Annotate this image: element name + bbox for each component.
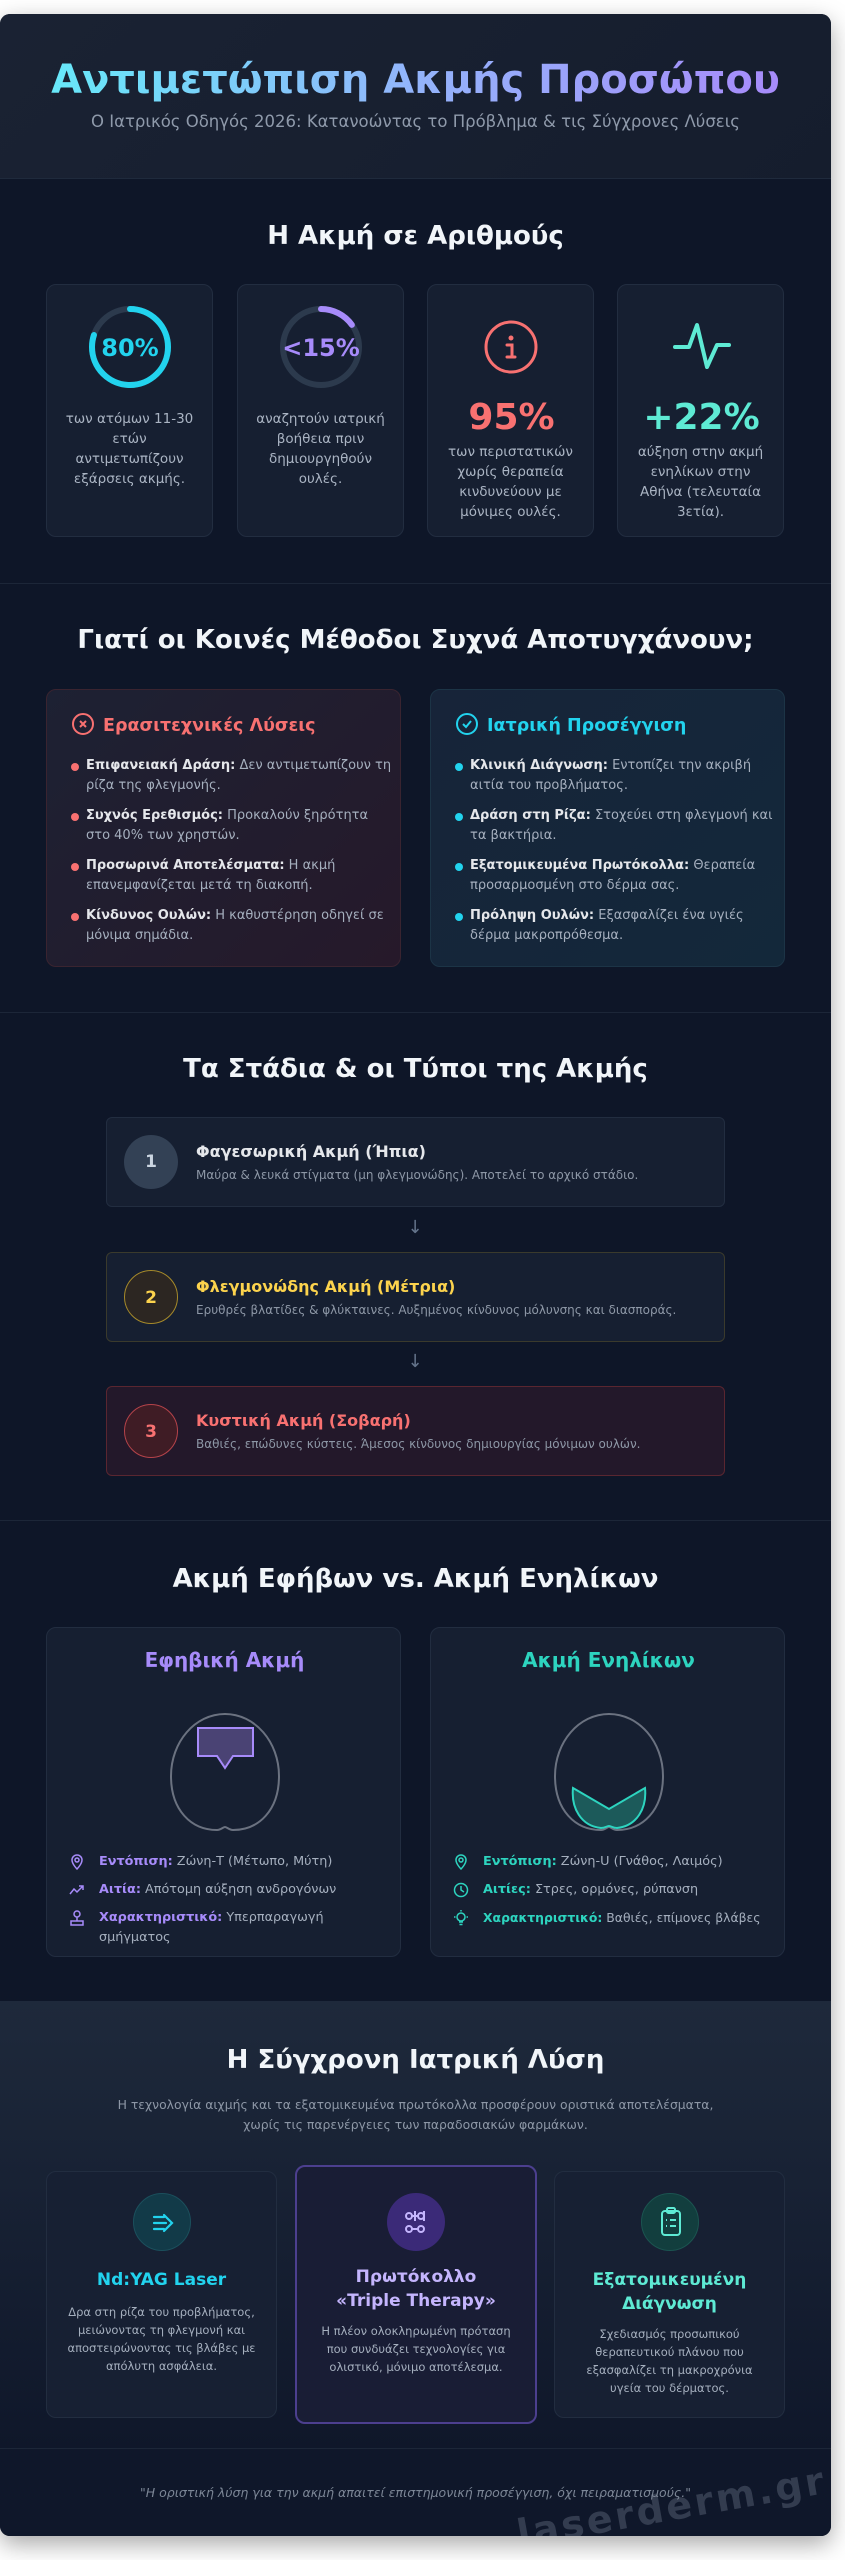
card: triple therapy xyxy=(295,2165,537,2424)
stage 1: Φαγεσωρική Ακμή (Ήπια) xyxy=(196,1142,426,1161)
panel: teen acne xyxy=(46,1627,401,1957)
ring 80% xyxy=(89,306,171,388)
icon: clipboard xyxy=(640,2193,698,2251)
card: triple therapy: «Triple Therapy» xyxy=(336,2291,496,2311)
details list: Χαρακτηριστικό: Βαθιές, επίμονες βλάβες xyxy=(483,1910,760,1925)
panel heading: Ερασιτεχνικές Λύσεις xyxy=(103,716,315,736)
heading: why methods fail: Γιατί οι Κοινές Μέθοδοι Συχνά Αποτυγχάνουν; xyxy=(77,625,754,655)
card: Nd:YAG xyxy=(46,2171,277,2418)
stat text: αναζητούν ιατρική βοήθεια πριν δημιουργηθούν ουλές. xyxy=(256,411,385,487)
details list: Εντόπιση: Ζώνη-Τ (Μέτωπο, Μύτη) xyxy=(99,1854,332,1869)
panel: amateur solutions xyxy=(46,689,401,967)
heading: stages: Τα Στάδια & οι Τύποι της Ακμής xyxy=(183,1054,648,1084)
heading: Η Σύγχρονη Ιατρική Λύση xyxy=(227,2045,604,2075)
heading: stats: Η Ακμή σε Αριθμούς xyxy=(267,221,564,251)
details list: Αιτία: Απότομη αύξηση ανδρογόνων xyxy=(99,1882,336,1897)
stage 2 xyxy=(106,1252,725,1342)
quote: "Η οριστική λύση για την ακμή απαιτεί επιστημονική προσέγγιση, όχι πειραματισμούς." xyxy=(140,2485,691,2500)
section: modern medical solution xyxy=(0,2001,831,2450)
face diagram T-zone xyxy=(170,1713,280,1831)
card: Nd:YAG: Nd:YAG Laser xyxy=(97,2270,226,2290)
ring 15% xyxy=(280,306,362,388)
list: Προσωρινά Αποτελέσματα: Η ακμή επανεμφανίζεται μετά τη διακοπή. xyxy=(86,858,335,893)
list: Εξατομικευμένα Πρωτόκολλα: Θεραπεία προσαρμοσμένη στο δέρμα σας. xyxy=(470,858,755,893)
heading: teen vs adult: Ακμή Εφήβων vs. Ακμή Ενηλίκων xyxy=(173,1564,658,1594)
stage 2: Φλεγμονώδης Ακμή (Μέτρια) xyxy=(196,1277,455,1296)
stage 1: 1 xyxy=(145,1152,157,1172)
stage 3: 3 xyxy=(145,1422,157,1442)
icon: protocol xyxy=(387,2193,445,2251)
details list: Αιτίες: Στρες, ορμόνες, ρύπανση xyxy=(483,1882,698,1897)
stage 2: Ερυθρές βλατίδες & φλύκταινες. Αυξημένος κίνδυνος μόλυνσης και διασποράς. xyxy=(196,1303,676,1317)
number: +22% xyxy=(643,397,760,438)
stat card 1 xyxy=(46,284,213,537)
list: Κίνδυνος Ουλών: Η καθυστέρηση οδηγεί σε μόνιμα σημάδια. xyxy=(86,908,384,943)
subtitle: Ο Ιατρικός Οδηγός 2026: Κατανοώντας το Πρόβλημα & τις Σύγχρονες Λύσεις xyxy=(91,112,740,131)
details list xyxy=(70,1854,336,1945)
stat text: αύξηση στην ακμή ενηλίκων στην Αθήνα (τελευταία 3ετία). xyxy=(638,444,763,520)
card: triple therapy: Η πλέον ολοκληρωμένη πρόταση που συνδυάζει τεχνολογίες για ολιστικό, μόνιμο αποτέλεσμα. xyxy=(321,2324,511,2374)
ring 15%: <15% xyxy=(282,334,360,362)
number: 95% xyxy=(468,397,555,438)
arrow: ↓ xyxy=(407,1217,423,1238)
list: Κλινική Διάγνωση: Εντοπίζει την ακριβή αιτία του προβλήματος. xyxy=(470,758,751,793)
card: personalized diagnosis xyxy=(554,2171,785,2418)
stage 3 xyxy=(106,1386,725,1476)
stat card 2 xyxy=(237,284,404,537)
card: personalized diagnosis: Διάγνωση xyxy=(622,2294,717,2314)
panel title: Ακμή Ενηλίκων xyxy=(522,1648,695,1672)
header xyxy=(0,14,831,179)
intro text: Η τεχνολογία αιχμής και τα εξατομικευμένα πρωτόκολλα προσφέρουν οριστικά αποτελέσματα, xyxy=(118,2097,713,2112)
icon: info xyxy=(484,320,538,374)
list: Δράση στη Ρίζα: Στοχεύει στη φλεγμονή και τα βακτήρια. xyxy=(470,808,772,843)
card: Nd:YAG: Δρα στη ρίζα του προβλήματος, μειώνοντας τη φλεγμονή και αποστειρώνοντας τις βλάβες με απόλυτη ασφάλεια. xyxy=(67,2305,256,2373)
face diagram U-zone xyxy=(554,1713,664,1831)
list xyxy=(71,758,391,943)
stat text: των περιστατικών χωρίς θεραπεία κινδυνεύουν με μόνιμες ουλές. xyxy=(448,444,573,520)
stat card 4 xyxy=(617,284,784,537)
card: personalized diagnosis: Εξατομικευμένη xyxy=(593,2270,746,2290)
stage 1 xyxy=(106,1117,725,1207)
list: Πρόληψη Ουλών: Εξασφαλίζει ένα υγιές δέρμα μακροπρόθεσμα. xyxy=(470,908,744,943)
details list: Εντόπιση: Ζώνη-U (Γνάθος, Λαιμός) xyxy=(483,1854,723,1869)
stage 1: Μαύρα & λευκά στίγματα (μη φλεγμονώδης). Αποτελεί το αρχικό στάδιο. xyxy=(196,1168,638,1182)
arrow: ↓ xyxy=(407,1351,423,1372)
list: Επιφανειακή Δράση: Δεν αντιμετωπίζουν τη ρίζα της φλεγμονής. xyxy=(86,758,391,793)
list: Συχνός Ερεθισμός: Προκαλούν ξηρότητα στο 40% των χρηστών. xyxy=(86,808,368,843)
list xyxy=(455,758,772,943)
stage 3: Κυστική Ακμή (Σοβαρή) xyxy=(196,1411,411,1430)
details list xyxy=(454,1854,760,1926)
ring 80%: 80% xyxy=(101,334,159,362)
stage 3: Βαθιές, επώδυνες κύστεις. Άμεσος κίνδυνος δημιουργίας μόνιμων ουλών. xyxy=(196,1437,640,1451)
stat text: των ατόμων 11-30 ετών αντιμετωπίζουν εξάρσεις ακμής. xyxy=(66,411,193,487)
intro text xyxy=(118,2097,713,2132)
panel: adult acne xyxy=(430,1627,785,1957)
card: triple therapy: Πρωτόκολλο xyxy=(356,2267,476,2287)
panel heading: Ιατρική Προσέγγιση xyxy=(487,716,686,736)
panel: medical approach xyxy=(430,689,785,967)
card: personalized diagnosis: Σχεδιασμός προσωπικού θεραπευτικού πλάνου που εξασφαλίζει τη μακροχρόνια υγεία του δέρματος. xyxy=(586,2327,753,2395)
stat card 3 xyxy=(427,284,594,537)
stage 2: 2 xyxy=(145,1288,157,1308)
intro text: χωρίς τις παρενέργειες των παραδοσιακών φαρμάκων. xyxy=(243,2117,588,2132)
details list: Χαρακτηριστικό: Υπερπαραγωγή σμήγματος xyxy=(99,1910,324,1945)
title: Αντιμετώπιση Ακμής Προσώπου xyxy=(51,57,780,103)
panel title: Εφηβική Ακμή xyxy=(145,1648,304,1672)
icon: pulse xyxy=(673,323,731,369)
icon: laser xyxy=(132,2193,190,2251)
footer xyxy=(0,2448,831,2536)
